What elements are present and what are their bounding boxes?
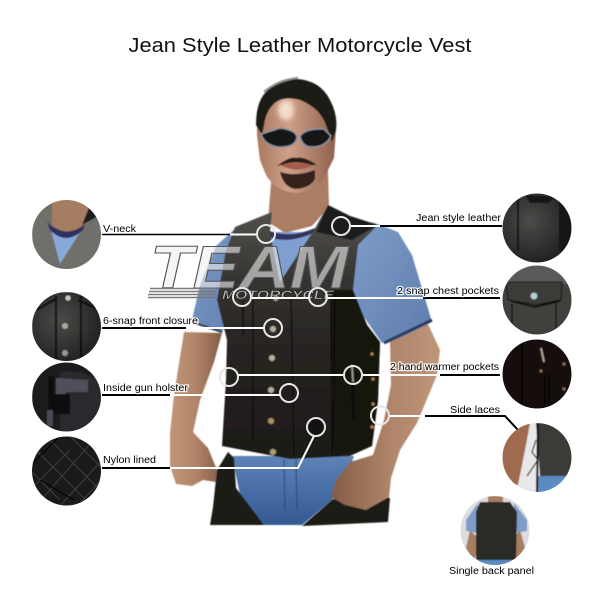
hair <box>256 79 336 142</box>
photo: man wearing leather vest <box>170 78 440 526</box>
left sleeve <box>192 226 245 333</box>
right sleeve <box>350 222 432 343</box>
label: nylon lined: Nylon lined <box>103 455 156 466</box>
icon: nylon lining detail <box>32 436 101 506</box>
callout: V-neck line <box>102 225 275 243</box>
callout: hand warmer line <box>220 366 500 386</box>
leather chaps <box>210 452 390 526</box>
title: Jean Style Leather Motorcycle Vest <box>128 35 472 57</box>
icon: side laces detail <box>502 423 572 493</box>
icon: jean style leather detail <box>502 193 572 263</box>
vest <box>217 205 380 459</box>
label: jean style leather: Jean style leather <box>416 213 502 224</box>
watermark logo: TEAM <box>150 234 350 301</box>
callout: gun holster line <box>102 384 298 402</box>
watermark logo: MOTORCYCLE <box>222 288 335 302</box>
head <box>257 80 336 193</box>
callout: chest pockets line <box>233 288 500 306</box>
labels <box>103 213 534 577</box>
goatee <box>280 170 315 189</box>
sunglasses <box>261 128 331 147</box>
snaps <box>268 295 279 455</box>
neck <box>268 170 329 233</box>
icon: chest pockets detail <box>502 265 572 335</box>
t-shirt <box>264 232 313 290</box>
right arm <box>331 322 440 510</box>
icon: back panel detail <box>460 496 530 566</box>
callout lines and markers <box>102 217 518 468</box>
icon: hand warmer pockets detail <box>502 339 572 410</box>
callout: front closure line <box>102 319 282 337</box>
icon: gun holster detail <box>32 362 102 432</box>
label: 2 hand warmer pockets: 2 hand warmer pockets <box>390 362 499 373</box>
callout: jean style leather line <box>332 217 502 235</box>
callout: nylon lined line <box>102 418 325 468</box>
label: inside gun holster: Inside gun holster <box>103 383 189 394</box>
label: side laces: Side laces <box>450 405 500 416</box>
jeans <box>232 456 354 525</box>
icon: V-neck detail <box>32 198 102 270</box>
callout: side laces line <box>371 406 518 430</box>
mustache <box>277 158 317 166</box>
icon: front closure detail <box>32 292 102 362</box>
left arm <box>170 332 222 486</box>
label: 2 snap chest pockets: 2 snap chest pockets <box>397 286 499 297</box>
label: 6-snap front closure: 6-snap front closure <box>103 316 198 327</box>
label: V-neck: V-neck <box>103 224 137 235</box>
label: single back panel: Single back panel <box>449 566 534 577</box>
mouth <box>280 163 313 170</box>
